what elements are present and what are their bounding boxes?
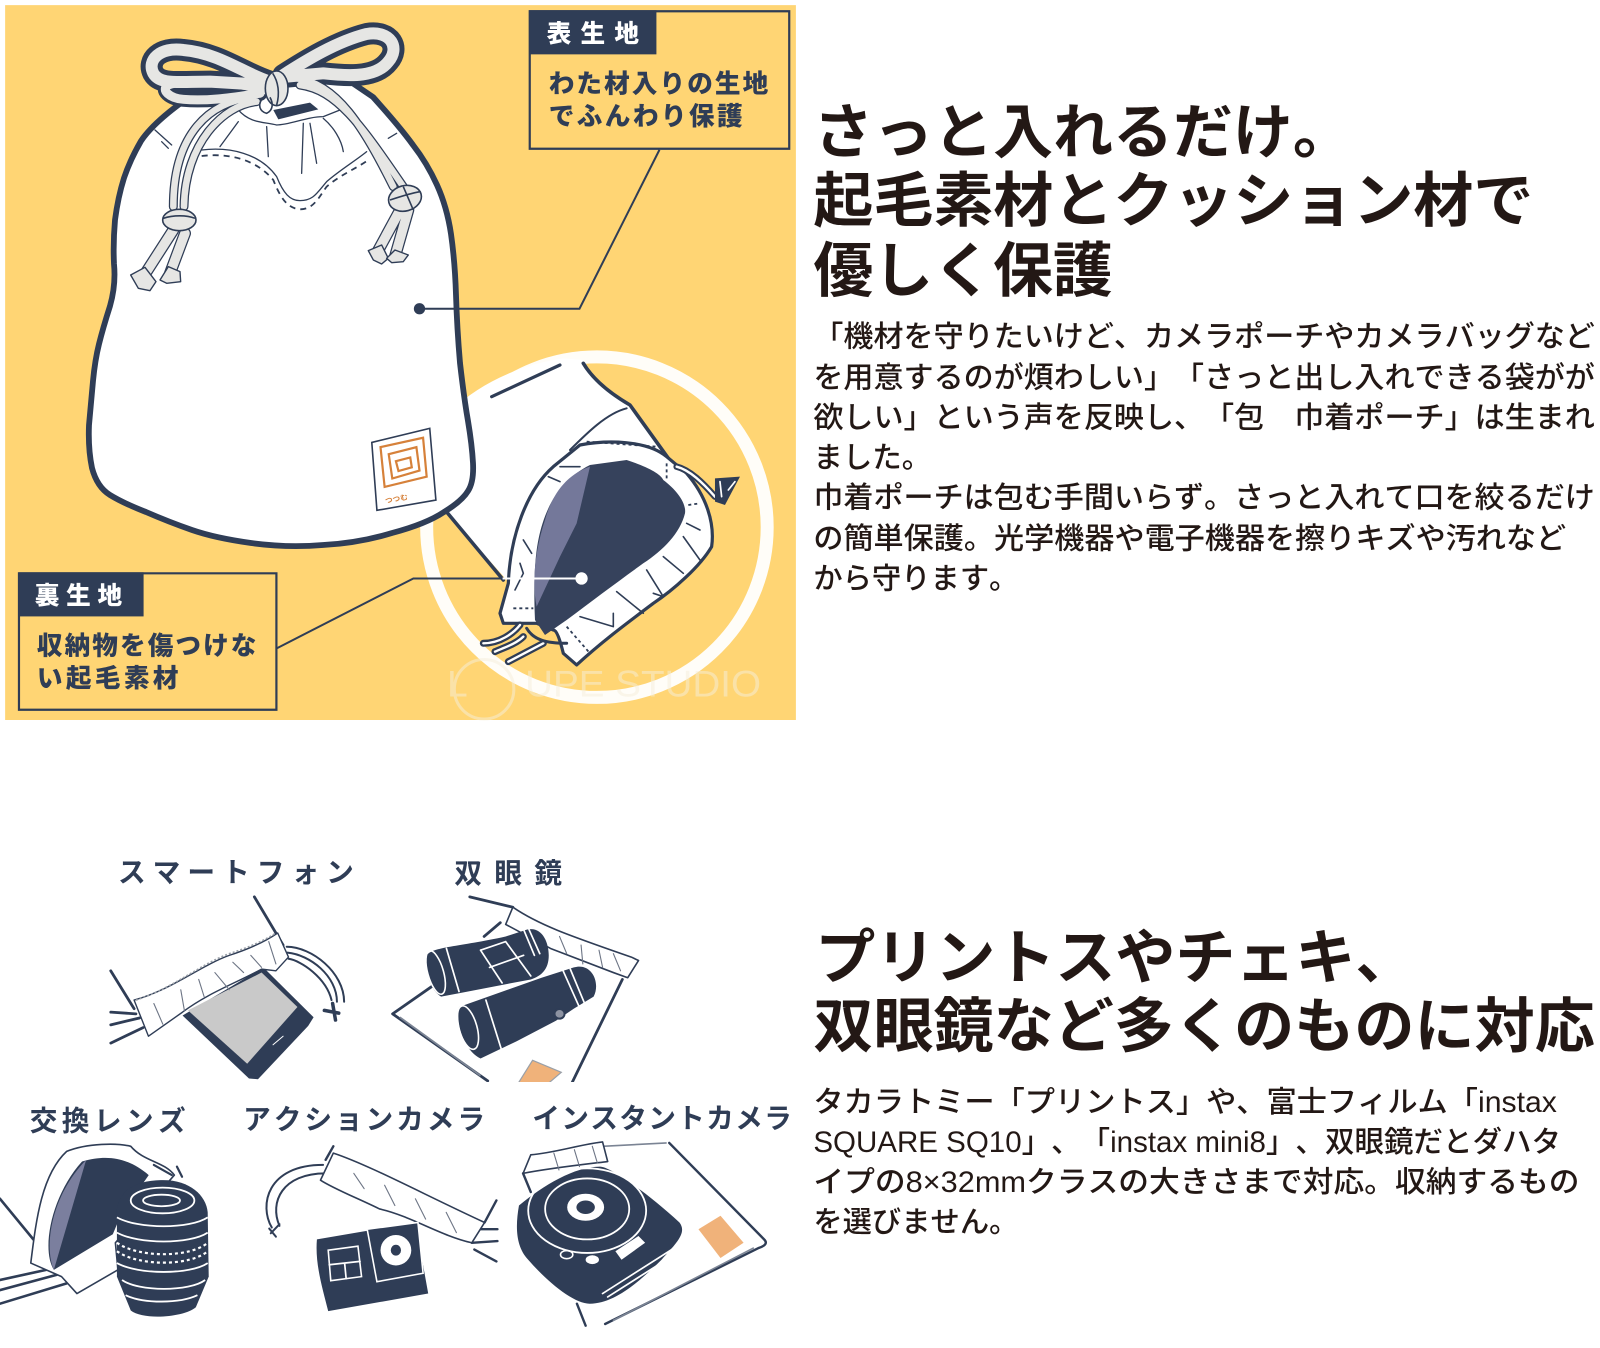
heading: protection: さっと入れるだけ。 xyxy=(813,99,1353,166)
icon: instant camera on pouch xyxy=(517,1142,766,1326)
text block: protection description: 巾着ポーチは包む手間いらず。さっと入れて口を絞るだけ xyxy=(813,482,1595,515)
caption: binoculars: 双眼鏡 xyxy=(454,858,562,889)
cord outlines xyxy=(143,33,408,277)
caption: instant camera: インスタントカメラ xyxy=(532,1103,792,1134)
cord knots xyxy=(163,71,424,231)
heading: compatibility xyxy=(813,924,1595,1060)
cord fill xyxy=(143,33,408,277)
icon: smartphone in pouch xyxy=(111,897,344,1079)
text block: protection description: 欲しい」という声を反映し、「包 巾着ポーチ」は生まれ xyxy=(813,402,1595,435)
watermark: UPE STUDIO xyxy=(525,663,761,704)
callout: inner fabric xyxy=(18,572,276,710)
cord ends xyxy=(131,245,408,291)
panel: pouch illustration xyxy=(5,5,796,720)
heading: protection xyxy=(813,99,1533,304)
watermark xyxy=(447,659,761,719)
callout: inner fabric: 裏生地 xyxy=(35,582,122,610)
text block: protection description: ました。 xyxy=(813,442,931,475)
icon: action camera with pouch xyxy=(266,1146,497,1311)
callout: outer fabric: わた材入りの生地 xyxy=(549,69,769,98)
icon: lens with pouch xyxy=(0,1144,209,1317)
pouch neck, seam and cords xyxy=(131,33,424,291)
heading: compatibility: 双眼鏡など多くのものに対応 xyxy=(813,993,1595,1060)
leader line: inner fabric xyxy=(277,572,588,648)
inset circle: inside of pouch xyxy=(427,357,767,697)
brand label: つつむ xyxy=(384,493,409,505)
brand label xyxy=(372,428,436,510)
icon: binoculars on pouch xyxy=(393,897,639,1086)
caption: action camera: アクションカメラ xyxy=(243,1104,485,1135)
leader line: outer fabric xyxy=(414,150,659,314)
callout: outer fabric: 表生地 xyxy=(547,20,639,48)
caption: smartphone: スマートフォン xyxy=(118,857,354,888)
panel: compatible items xyxy=(0,857,792,1326)
callout: inner fabric: い起毛素材 xyxy=(37,664,178,693)
caption: interchangeable lens: 交換レンズ xyxy=(30,1105,186,1136)
text block: protection description: から守ります。 xyxy=(813,563,1018,596)
stitched seam xyxy=(202,149,368,209)
callout: outer fabric xyxy=(529,10,789,149)
heading: compatibility: プリントスやチェキ、 xyxy=(815,924,1415,991)
yellow panel background xyxy=(5,5,796,720)
text block: compatibility description xyxy=(813,1086,1579,1239)
callout: outer fabric: でふんわり保護 xyxy=(549,102,743,131)
text block: protection description: を用意するのが煩わしい」「さっと出し入れできる袋がが xyxy=(813,362,1595,395)
callout: inner fabric: 収納物を傷つけな xyxy=(37,631,256,660)
heading: protection: 起毛素材とクッション材で xyxy=(813,168,1533,235)
watermark: L xyxy=(447,663,468,704)
text block: compatibility description: イプの8×32mmクラスの大きさまで対応。収納するもの xyxy=(813,1166,1579,1199)
text block: protection description xyxy=(813,321,1595,596)
pouch body xyxy=(89,78,473,546)
gathered neck lines xyxy=(155,103,397,173)
heading: protection: 優しく保護 xyxy=(813,237,1113,304)
text block: protection description: 「機材を守りたいけど、カメラポーチやカメラバッグなど xyxy=(813,321,1595,354)
text block: compatibility description: タカラトミー「プリントス」や、富士フィルム「instax xyxy=(813,1086,1557,1119)
text block: compatibility description: SQUARE SQ10」、「instax mini8」、双眼鏡だとダハタ xyxy=(813,1126,1561,1159)
text block: protection description: の簡単保護。光学機器や電子機器を擦りキズや汚れなど xyxy=(813,523,1566,556)
text block: compatibility description: を選びません。 xyxy=(813,1206,1018,1239)
